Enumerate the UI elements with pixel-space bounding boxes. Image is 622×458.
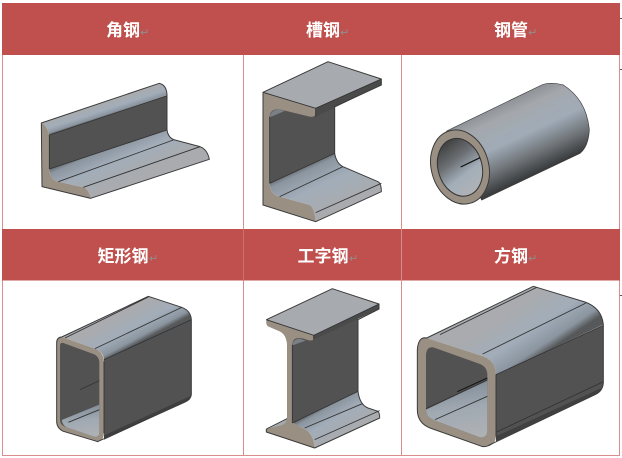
panel: square steel [402, 229, 620, 447]
icon: angle steel profile [41, 83, 209, 198]
header: 槽钢 [243, 3, 402, 55]
header: 工字钢: 工字钢 [298, 246, 348, 266]
header: 槽钢: ↵ [340, 26, 349, 39]
icon: I-beam profile [266, 289, 380, 448]
header: 钢管: ↵ [528, 26, 537, 39]
header: 工字钢 [244, 229, 401, 280]
panel: angle steel [2, 3, 244, 198]
header: 矩形钢 [2, 229, 244, 280]
header: 工字钢: ↵ [349, 252, 358, 265]
header: 矩形钢: 矩形钢 [98, 247, 148, 266]
panel: channel steel [243, 3, 402, 222]
header: 角钢 [2, 3, 244, 55]
header: 方钢 [402, 229, 620, 280]
header: 矩形钢: ↵ [149, 252, 158, 265]
header: 角钢: 角钢 [106, 20, 140, 40]
panel: I-beam [244, 229, 401, 448]
header: 方钢: ↵ [528, 252, 537, 265]
header: 钢管 [401, 3, 620, 55]
header: 方钢: 方钢 [494, 246, 528, 266]
icon: square tube [417, 286, 603, 447]
header: 槽钢: 槽钢 [306, 21, 340, 40]
icon: rectangular tube [57, 296, 191, 442]
header: 角钢: ↵ [140, 26, 149, 39]
icon: channel steel profile [263, 62, 381, 222]
panel: steel pipe [401, 3, 620, 211]
panel: rectangular steel [2, 229, 244, 442]
header: 钢管: 钢管 [494, 20, 528, 40]
icon: steel pipe [422, 83, 589, 211]
